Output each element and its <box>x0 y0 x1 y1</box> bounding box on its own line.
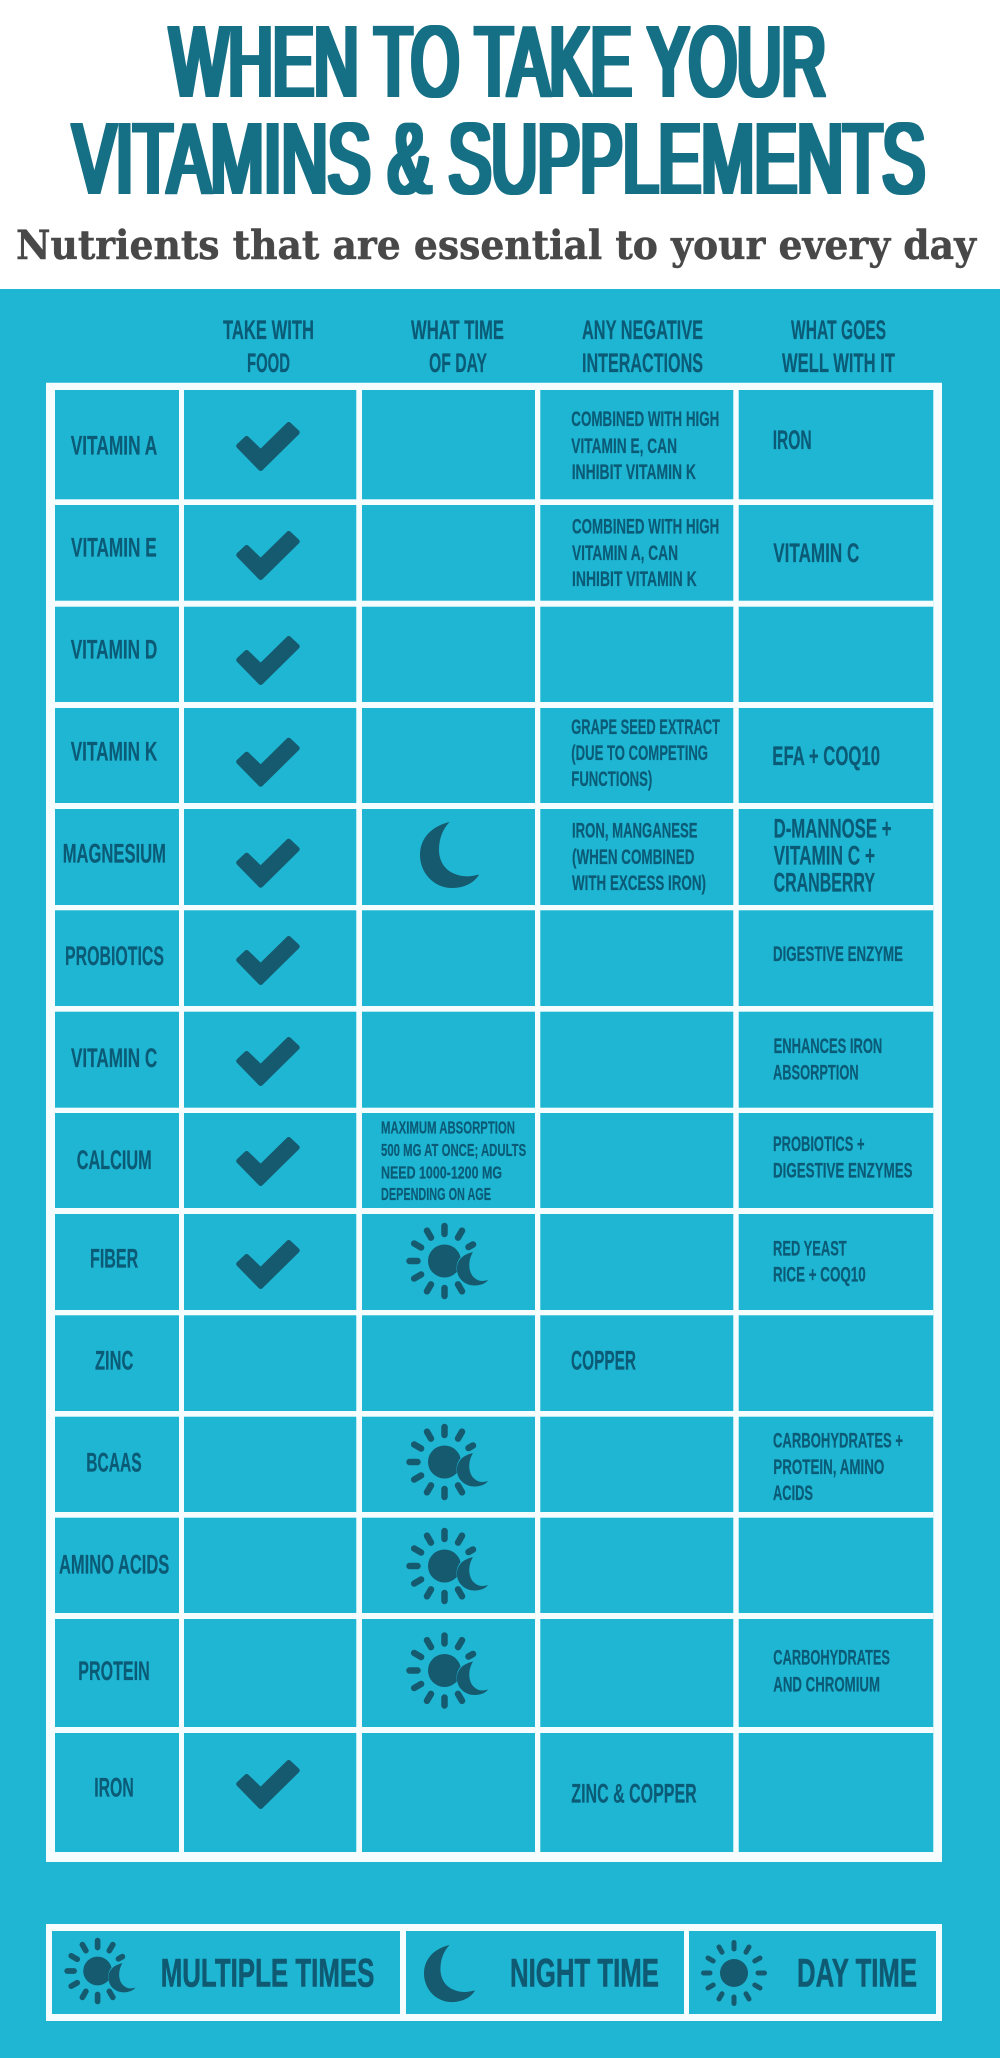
goes well with: CRANBERRY <box>774 868 875 898</box>
negative interactions: ZINC & COPPER <box>571 1778 697 1808</box>
row: vitamin a <box>71 408 812 484</box>
time of day note: 500 MG AT ONCE; ADULTS <box>381 1140 526 1160</box>
heading: any negative interactions: ANY NEGATIVE <box>582 315 703 345</box>
icon: check <box>239 638 297 682</box>
row: vitamin k <box>71 716 880 791</box>
goes well with: VITAMIN C <box>773 538 859 568</box>
time of day note <box>381 1118 526 1204</box>
legend item: day time <box>704 1942 917 2004</box>
heading: what time of day <box>411 315 504 378</box>
heading: what time of day: WHAT TIME <box>411 315 504 345</box>
negative interactions: IRON, MANGANESE <box>572 819 698 842</box>
negative interactions: VITAMIN E, CAN <box>571 435 677 458</box>
icon: sun <box>704 1942 764 2004</box>
icon: check <box>239 1242 297 1286</box>
goes well with: EFA + COQ10 <box>772 741 880 771</box>
time of day note: NEED 1000-1200 MG <box>381 1162 502 1182</box>
label: BCAAS <box>86 1448 142 1478</box>
icon: moon <box>424 1945 475 2002</box>
icon: check <box>239 841 297 885</box>
legend frame <box>46 1924 942 2021</box>
label: ZINC <box>95 1345 133 1375</box>
negative interactions: FUNCTIONS) <box>571 768 652 791</box>
icon: sun and moon <box>410 1226 490 1296</box>
label: VITAMIN K <box>71 736 157 766</box>
title <box>73 6 925 215</box>
legend <box>46 1924 942 2021</box>
negative interactions <box>572 819 706 895</box>
negative interactions: INHIBIT VITAMIN K <box>572 568 697 591</box>
label: VITAMIN D <box>71 634 157 664</box>
negative interactions: COMBINED WITH HIGH <box>571 408 719 431</box>
negative interactions <box>571 408 719 484</box>
label: MULTIPLE TIMES <box>161 1952 374 1996</box>
goes well with: PROBIOTICS + <box>773 1133 864 1156</box>
goes well with: D-MANNOSE + <box>774 814 892 844</box>
goes well with <box>773 1646 890 1696</box>
label: PROBIOTICS <box>65 941 164 971</box>
negative interactions <box>572 515 719 591</box>
time of day note: DEPENDING ON AGE <box>381 1184 491 1204</box>
icon: sun and moon <box>67 1941 138 2001</box>
label: NIGHT TIME <box>510 1952 659 1996</box>
icon: sun and moon <box>410 1636 490 1706</box>
icon: check <box>239 534 297 578</box>
table grid <box>46 383 942 1862</box>
label: VITAMIN A <box>71 431 157 461</box>
goes well with: DIGESTIVE ENZYME <box>773 943 903 966</box>
negative interactions: WITH EXCESS IRON) <box>572 872 706 895</box>
row: protein <box>78 1636 890 1706</box>
negative interactions: (DUE TO COMPETING <box>571 742 708 765</box>
goes well with: AND CHROMIUM <box>773 1673 880 1696</box>
icon: moon <box>420 822 479 888</box>
goes well with: CARBOHYDRATES <box>773 1646 890 1669</box>
row: vitamin d <box>71 634 297 682</box>
negative interactions: GRAPE SEED EXTRACT <box>571 716 720 739</box>
icon: check <box>239 1140 297 1184</box>
icon: check <box>239 1040 297 1084</box>
row: iron <box>94 1762 697 1808</box>
icon: sun and moon <box>410 1531 490 1601</box>
row: fiber <box>90 1226 866 1296</box>
goes well with: RED YEAST <box>773 1237 847 1260</box>
goes well with: CARBOHYDRATES + <box>773 1430 903 1453</box>
label: FIBER <box>90 1244 138 1274</box>
row: vitamin c <box>71 1035 882 1085</box>
goes well with <box>773 1430 903 1505</box>
heading: take with food: TAKE WITH <box>223 315 314 345</box>
heading: what time of day: OF DAY <box>429 348 487 378</box>
row: vitamin e <box>71 515 859 591</box>
goes well with: ENHANCES IRON <box>774 1035 882 1058</box>
icon: check <box>239 938 297 982</box>
row: calcium <box>77 1118 913 1204</box>
heading: what goes well with it: WHAT GOES <box>791 315 886 345</box>
icon: check <box>239 740 297 784</box>
icon: check <box>239 1762 297 1806</box>
column headings <box>223 315 895 378</box>
legend item: multiple times <box>67 1941 374 2001</box>
label: VITAMIN C <box>71 1043 157 1073</box>
goes well with <box>774 814 892 898</box>
row: probiotics <box>65 938 903 982</box>
icon: check <box>239 424 297 468</box>
heading: any negative interactions <box>582 315 703 378</box>
goes well with: PROTEIN, AMINO <box>773 1456 884 1479</box>
label: PROTEIN <box>78 1656 150 1686</box>
time of day note: MAXIMUM ABSORPTION <box>381 1118 515 1138</box>
label: MAGNESIUM <box>63 838 166 868</box>
heading: what goes well with it: WELL WITH IT <box>782 348 895 378</box>
negative interactions: COPPER <box>571 1346 636 1376</box>
negative interactions: INHIBIT VITAMIN K <box>572 461 696 484</box>
row: magnesium <box>63 814 891 898</box>
label: CALCIUM <box>77 1145 152 1175</box>
heading: take with food: FOOD <box>247 348 290 378</box>
negative interactions: COMBINED WITH HIGH <box>572 515 719 538</box>
icon: sun and moon <box>410 1427 490 1497</box>
row: bcaas <box>86 1427 903 1505</box>
label: DAY TIME <box>797 1952 917 1996</box>
row: zinc <box>95 1345 636 1376</box>
heading: what goes well with it <box>782 315 895 378</box>
legend item: night time <box>424 1945 659 2002</box>
goes well with <box>773 1035 882 1085</box>
negative interactions: VITAMIN A, CAN <box>572 542 678 565</box>
goes well with: IRON <box>773 425 812 455</box>
goes well with: VITAMIN C + <box>774 841 875 871</box>
goes well with: ACIDS <box>773 1482 813 1505</box>
label: AMINO ACIDS <box>59 1549 169 1579</box>
negative interactions: (WHEN COMBINED <box>572 846 694 869</box>
label: IRON <box>94 1773 134 1803</box>
heading: any negative interactions: INTERACTIONS <box>582 348 703 378</box>
heading: take with food <box>223 315 314 378</box>
negative interactions <box>571 716 720 791</box>
goes well with: DIGESTIVE ENZYMES <box>773 1160 913 1183</box>
goes well with: ABSORPTION <box>773 1062 859 1085</box>
row: amino acids <box>59 1531 490 1601</box>
goes well with: RICE + COQ10 <box>773 1264 866 1287</box>
label: VITAMIN E <box>71 533 157 563</box>
goes well with <box>773 1133 913 1183</box>
goes well with <box>773 1237 866 1287</box>
